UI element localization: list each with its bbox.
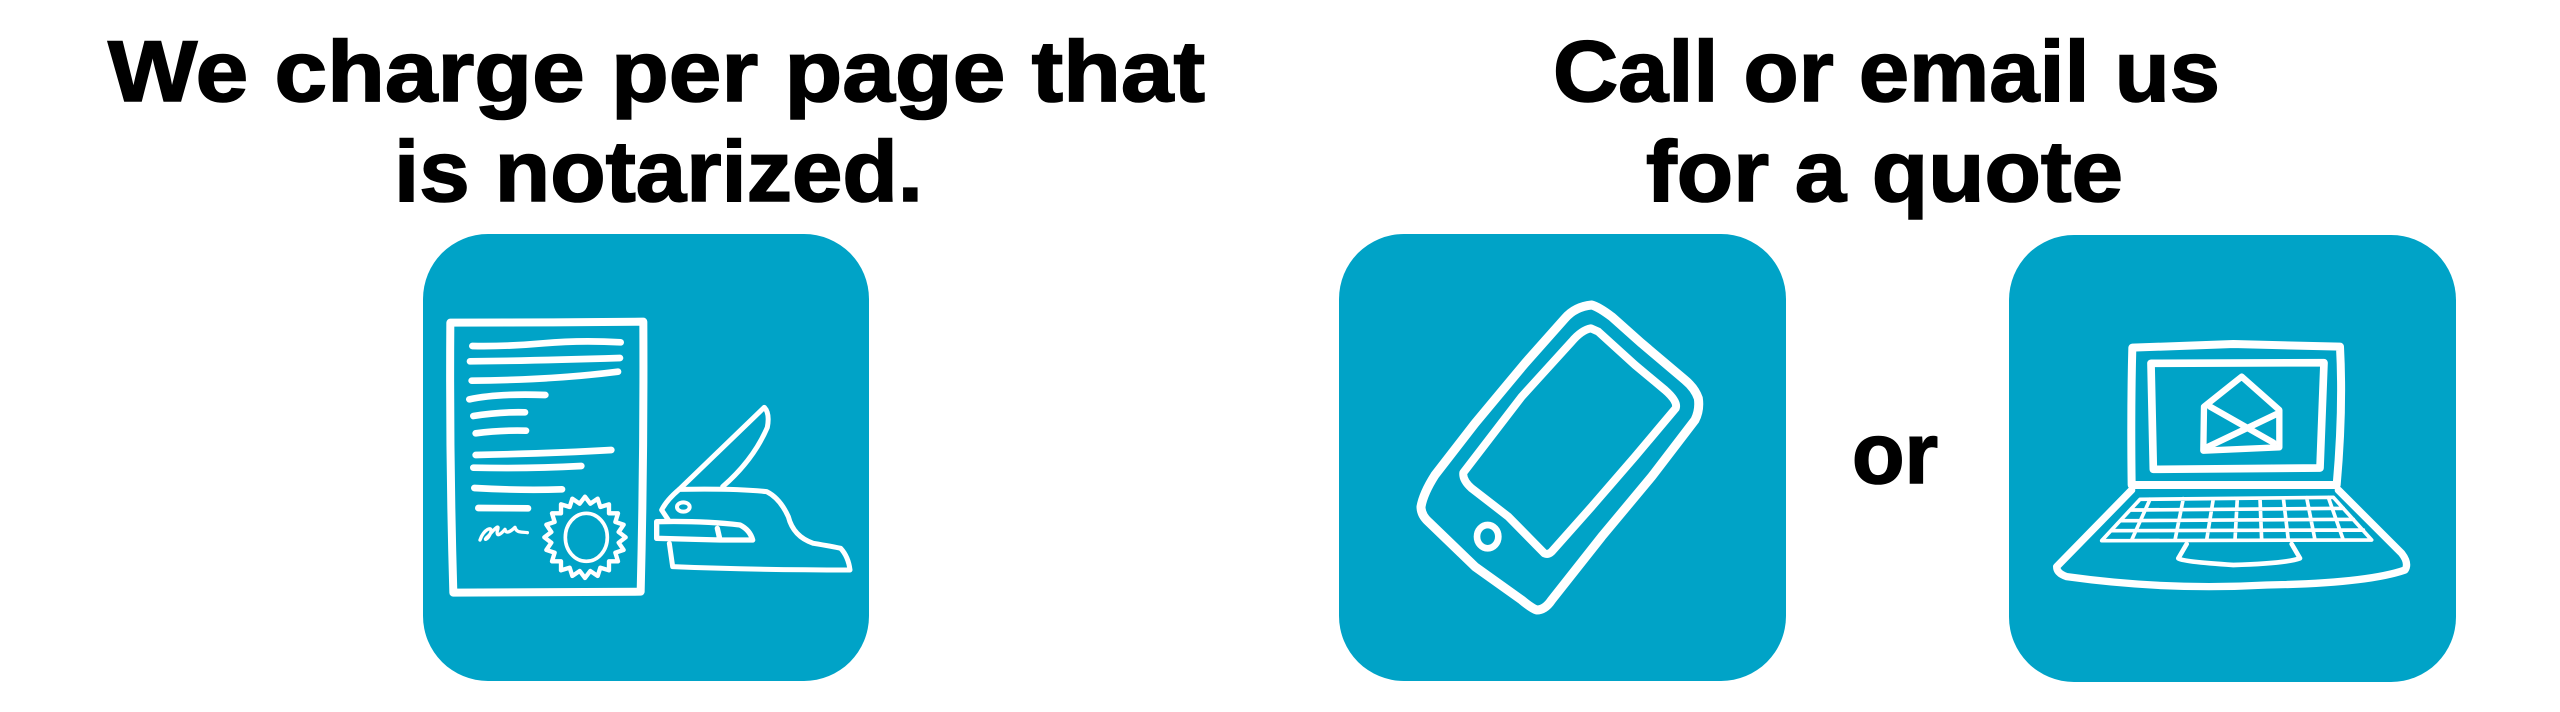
panel: notarized document: [423, 234, 869, 681]
icon: laptop with envelope: [2057, 344, 2407, 587]
panel: email: [2009, 235, 2456, 682]
heading: contact: for a quote: [1646, 124, 2123, 220]
label: or: or: [1852, 406, 1938, 502]
heading: pricing: We charge per page that: [108, 24, 1205, 120]
heading: contact: [1553, 24, 2220, 220]
icon: smartphone: [1421, 305, 1699, 610]
heading: pricing: [108, 24, 1205, 220]
icon: document with seal: [450, 322, 643, 593]
heading: contact: Call or email us: [1553, 24, 2220, 120]
heading: pricing: is notarized.: [394, 124, 923, 220]
icon: embosser stamp: [657, 407, 850, 570]
panel: phone: [1339, 234, 1786, 681]
